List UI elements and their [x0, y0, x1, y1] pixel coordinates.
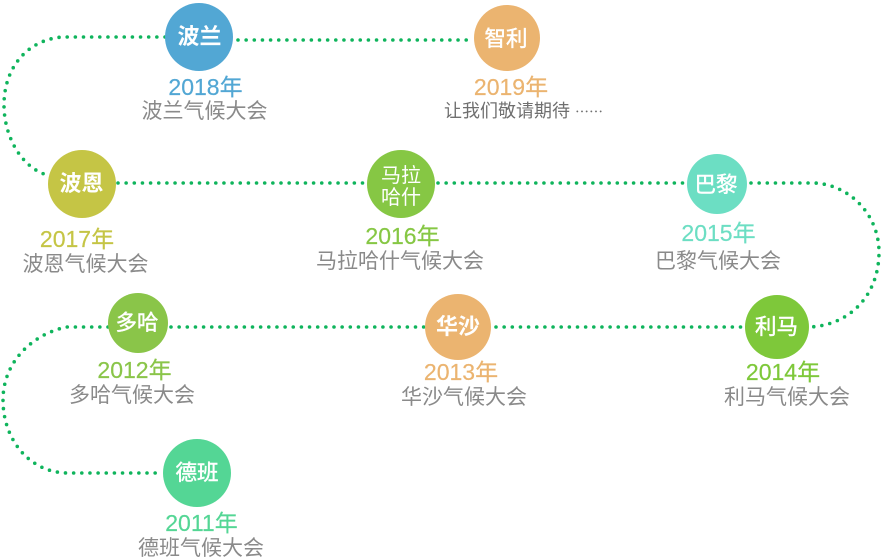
stop: 2018 Poland — [142, 3, 268, 123]
stop: 2017 Bonn: 2017年 — [40, 226, 114, 252]
stop: 2017 Bonn — [22, 150, 148, 276]
stop: 2016 Marrakech: 哈什 — [381, 186, 421, 209]
stop: 2015 Paris — [655, 154, 781, 273]
stop: 2016 Marrakech: 2016年 — [365, 223, 440, 249]
stop: 2019 Chile: 2019年 — [474, 74, 548, 100]
stop: 2014 Lima: 利马气候大会 — [724, 386, 850, 409]
stop: 2014 Lima — [724, 295, 850, 409]
stop: 2017 Bonn: 波恩 — [59, 171, 104, 196]
stop: 2019 Chile: …… — [575, 102, 603, 122]
stop: 2015 Paris: 巴黎 — [694, 173, 738, 197]
stop: 2011 Durban: 德班 — [175, 461, 219, 485]
stop: 2013 Warsaw: 华沙 — [436, 314, 480, 339]
stop: 2012 Doha: 多哈气候大会 — [69, 384, 195, 407]
stop: 2016 Marrakech: 马拉哈什气候大会 — [316, 250, 484, 273]
stop: 2013 Warsaw: 2013年 — [424, 359, 498, 385]
stop: 2019 Chile: 智利 — [484, 27, 528, 51]
stop: 2014 Lima: 2014年 — [746, 359, 820, 385]
stop: 2018 Poland: 2018年 — [168, 74, 243, 100]
stop: 2013 Warsaw — [401, 294, 527, 409]
stop: 2011 Durban: 德班气候大会 — [138, 537, 264, 560]
stop: 2016 Marrakech — [316, 150, 484, 273]
stop: 2012 Doha — [69, 293, 195, 407]
stop: 2012 Doha: 多哈 — [115, 311, 159, 335]
stop: 2014 Lima: 利马 — [755, 315, 798, 339]
dotted route — [3, 37, 879, 473]
stop: 2019 Chile: 让我们敬请期待 — [444, 101, 570, 121]
stop: 2011 Durban — [138, 439, 264, 560]
stop: 2012 Doha: 2012年 — [97, 357, 172, 383]
stop: 2013 Warsaw: 华沙气候大会 — [401, 386, 527, 409]
stop: 2011 Durban: 2011年 — [165, 510, 238, 536]
stop: 2016 Marrakech: 马拉 — [381, 164, 421, 187]
stop: 2019 Chile — [444, 5, 603, 122]
stop: 2018 Poland: 波兰气候大会 — [142, 100, 268, 123]
stop: 2015 Paris: 2015年 — [681, 220, 756, 246]
stop: 2017 Bonn: 波恩气候大会 — [22, 253, 148, 276]
stop: 2018 Poland: 波兰 — [177, 24, 222, 49]
stop: 2015 Paris: 巴黎气候大会 — [655, 250, 781, 273]
